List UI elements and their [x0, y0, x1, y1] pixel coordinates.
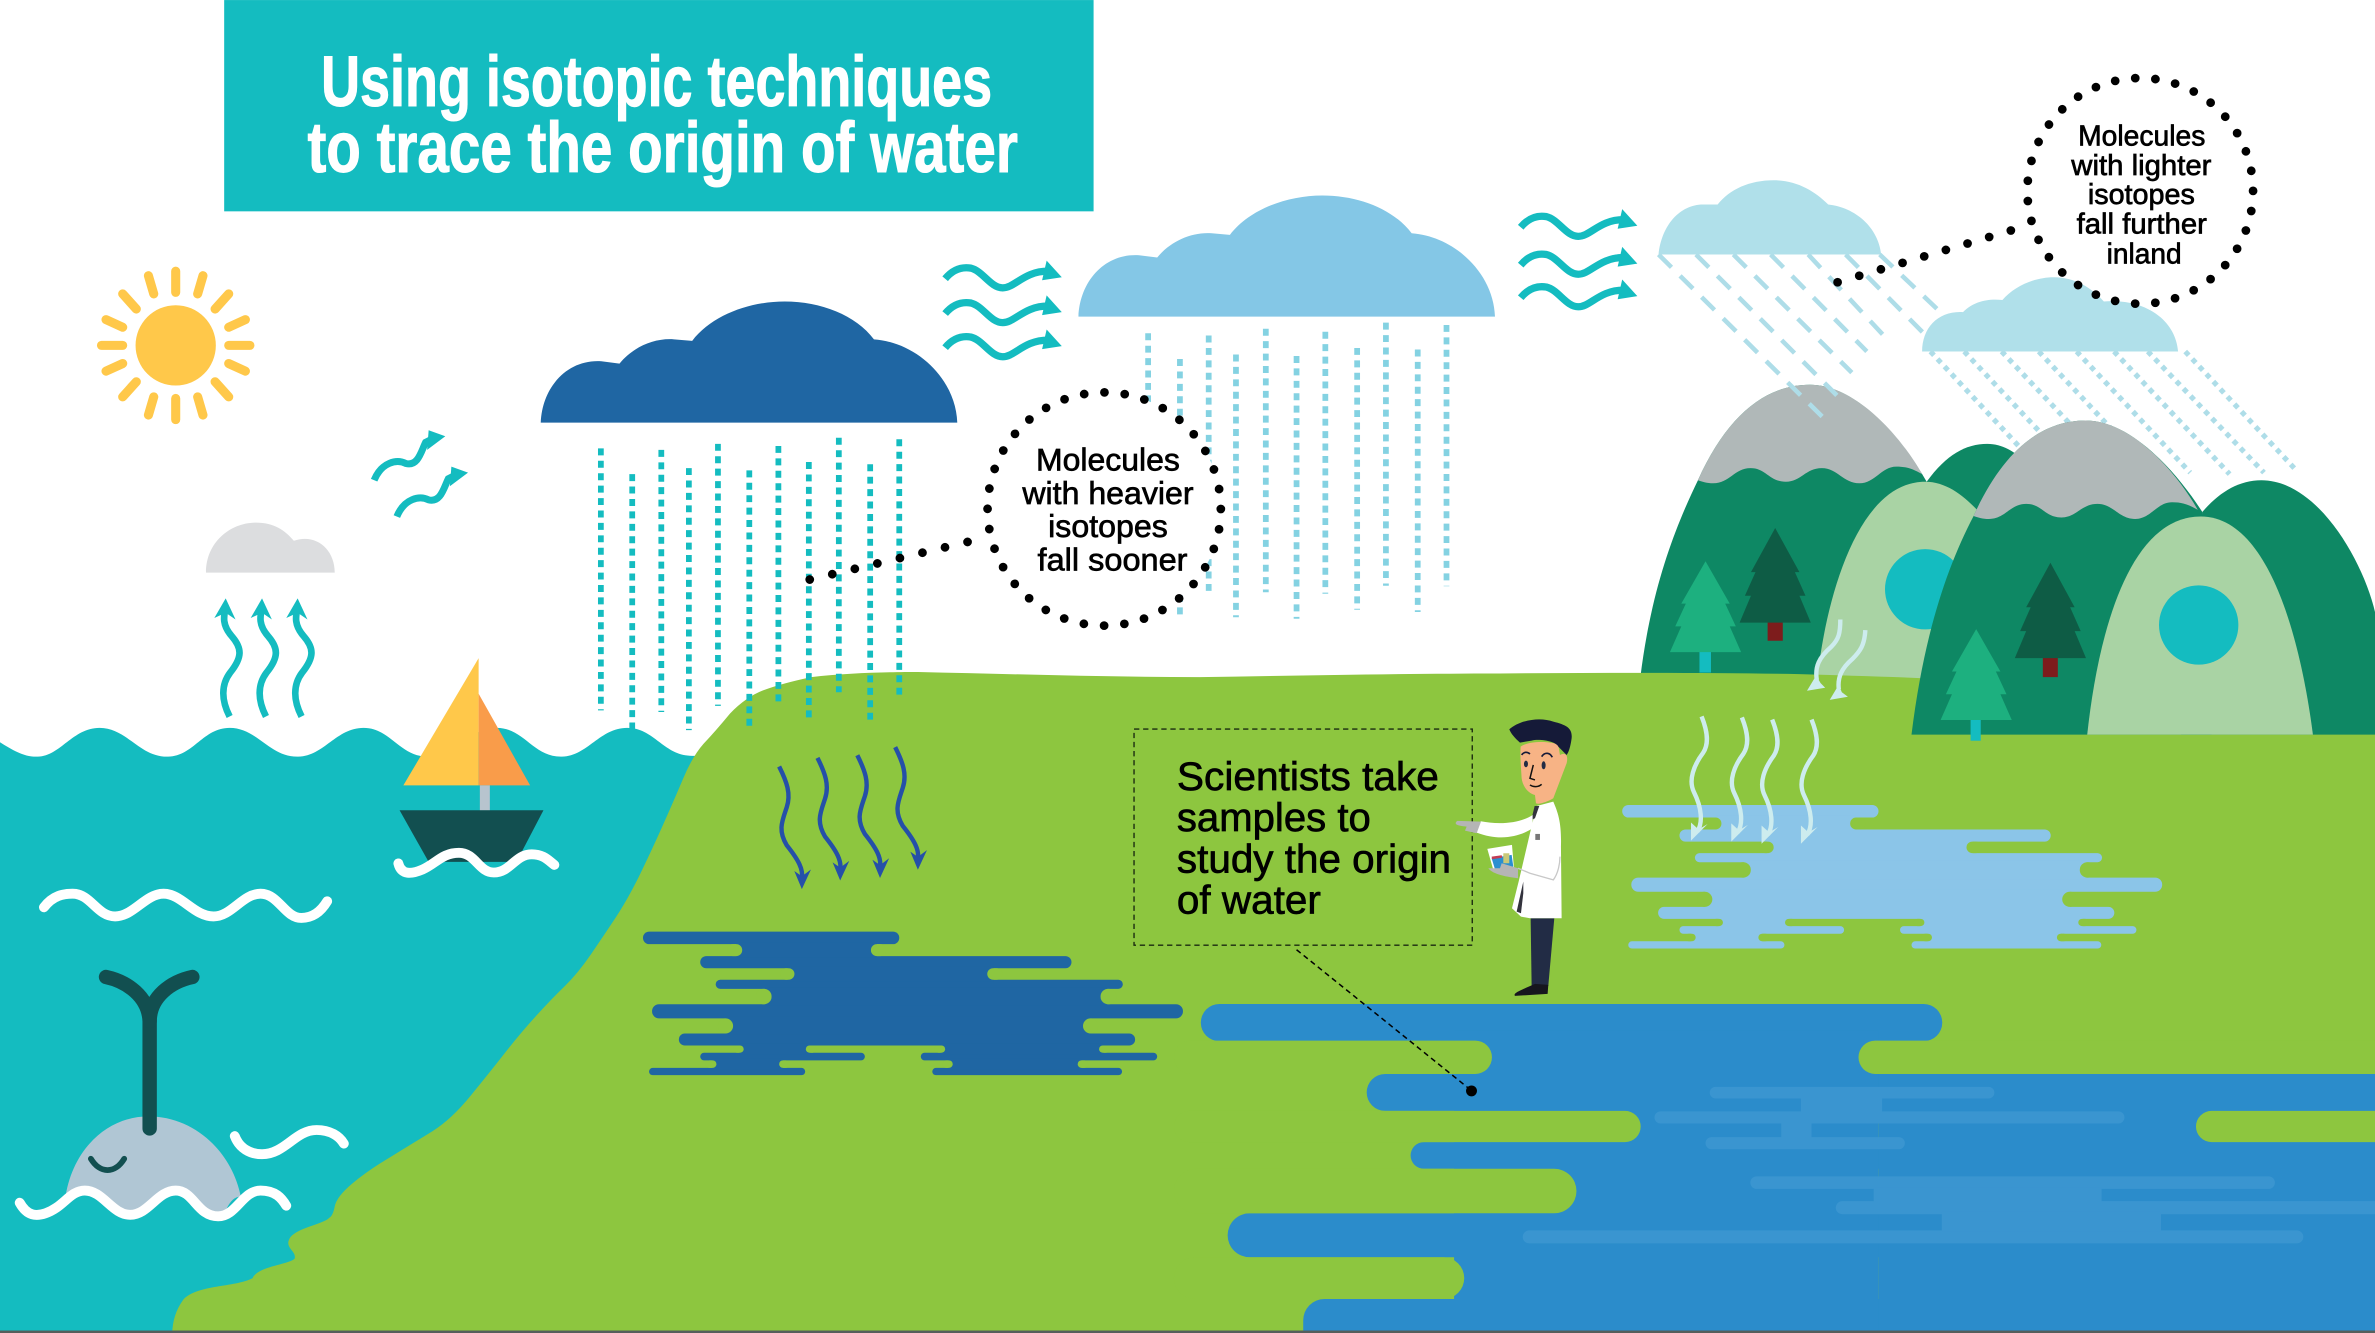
light pond — [1622, 805, 2162, 949]
callout: heavier isotopes: isotopes — [1048, 508, 1168, 544]
wave in open sea — [44, 894, 327, 918]
arrows: wind set two — [1521, 209, 1637, 307]
callout: lighter isotopes: isotopes — [2088, 179, 2195, 211]
panel: back mountains — [1640, 385, 2025, 682]
rain: heavier drops — [601, 438, 899, 730]
callout: heavier isotopes — [810, 392, 1221, 626]
callout: lighter isotopes: Molecules — [2078, 120, 2205, 152]
cloud: mid blue — [1078, 195, 1495, 317]
callout: lighter isotopes: inland — [2107, 238, 2182, 270]
icon: small arrows rising — [374, 430, 468, 517]
arrows: pale into light pond — [1691, 716, 1818, 844]
wave beside whale — [235, 1130, 344, 1154]
dotted rain from second pale cloud — [1930, 351, 2298, 474]
callout: heavier isotopes: with heavier — [1021, 475, 1194, 511]
trees — [1670, 528, 2086, 741]
title panel — [224, 0, 1094, 211]
cloud: pale blue farther inland — [1922, 277, 2178, 351]
boat — [400, 658, 543, 862]
whale — [65, 977, 241, 1216]
wave under boat — [398, 853, 554, 873]
cloud: dark heavy — [541, 301, 957, 423]
text box: scientists: study the origin — [1177, 837, 1451, 881]
arrows: wind set one — [945, 261, 1062, 357]
panel: front mountains — [1912, 421, 2375, 735]
cloud: small grey — [206, 523, 335, 573]
arrows: navy runoff — [779, 747, 927, 889]
icon: sun — [101, 271, 250, 420]
text box: scientists — [1134, 729, 1472, 945]
callout: heavier isotopes: Molecules — [1036, 441, 1180, 477]
wave over whale — [20, 1191, 286, 1216]
lake — [1174, 1004, 2375, 1333]
slanted rain from pale cloud — [1659, 255, 1939, 417]
leader line to sample point — [1297, 950, 1477, 1096]
text box: scientists: samples to — [1177, 796, 1371, 840]
scientist figure — [1456, 719, 1572, 996]
land — [172, 672, 2375, 1333]
callout: lighter isotopes: fall further — [2077, 209, 2207, 241]
callout: heavier isotopes: fall sooner — [1038, 541, 1188, 577]
cloud: pale blue inland — [1659, 180, 1881, 255]
title panel: Using isotopic techniques — [321, 43, 992, 122]
text box: scientists: of water — [1177, 878, 1321, 922]
arrows: pale from mountain — [1807, 620, 1865, 700]
bottom edge line — [0, 1331, 2375, 1333]
text box: scientists: Scientists take — [1177, 755, 1439, 799]
title panel: to trace the origin of water — [307, 109, 1018, 188]
arrows: evaporation from sea — [214, 598, 311, 716]
sea — [0, 728, 757, 1333]
callout: lighter isotopes: with lighter — [2070, 150, 2212, 182]
rain: mid drops — [1148, 323, 1447, 619]
callout: lighter isotopes — [1838, 78, 2253, 304]
dark pond — [643, 932, 1183, 1075]
